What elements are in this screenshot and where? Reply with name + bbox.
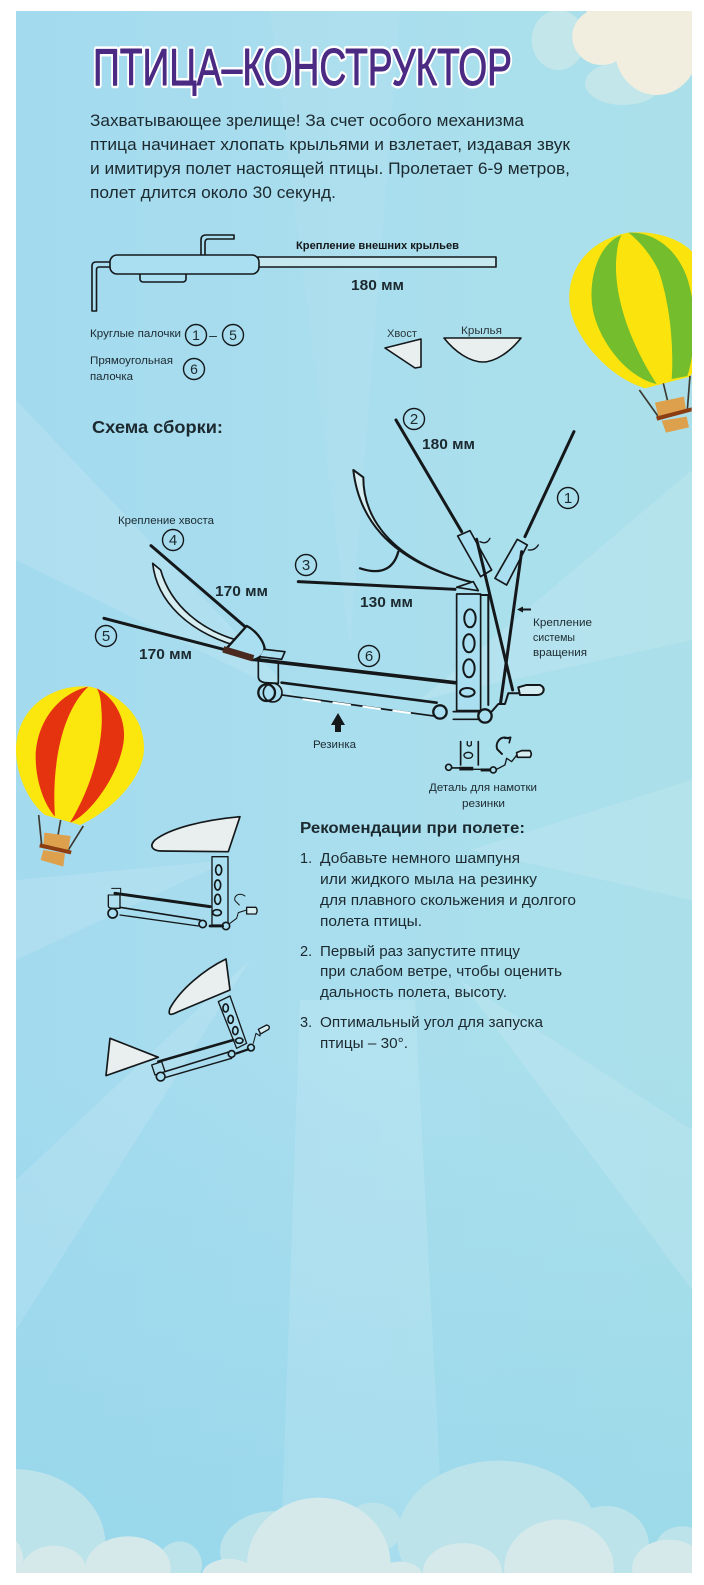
title: ПТИЦА–КОНСТРУКТОР (93, 39, 512, 97)
labels: lengths: 180 мм (422, 436, 475, 453)
legend: tail and wings (385, 325, 521, 368)
legend: sticks: Прямоугольная (90, 355, 173, 367)
labels: lengths (139, 436, 475, 663)
label: 180 mm: 180 мм (351, 277, 404, 294)
legend: sticks: 5 (229, 327, 237, 343)
balloon: red and yellow (16, 686, 144, 867)
lower frame (258, 662, 278, 683)
labels: assembly numbers: 4 (169, 532, 177, 549)
diagram: wing mount rod (92, 235, 496, 311)
intro text: птица начинает хлопать крыльями и взлетает, издавая звук (90, 136, 571, 154)
vertical plate (457, 594, 481, 711)
label: wing mount: Крепление внешних крыльев (296, 240, 459, 252)
list: flight recommendations: 3. (300, 1015, 312, 1031)
clouds: bottom (16, 1460, 692, 1573)
heading: flight recommendations: Рекомендации при полете: (300, 820, 525, 837)
list: flight recommendations: Добавьте немного шампуня (320, 851, 520, 867)
legend: sticks: Круглые палочки (90, 328, 181, 340)
legend: sticks: – (209, 327, 217, 343)
legend: tail and wings: Хвост (387, 328, 417, 340)
labels: lengths: 130 мм (360, 594, 413, 611)
legend: sticks: палочка (90, 371, 134, 383)
list: flight recommendations: 1. (300, 851, 312, 867)
legend: sticks: 6 (190, 361, 198, 377)
rods (104, 420, 574, 683)
labels: parts: Деталь для намотки (429, 782, 537, 794)
intro text: Захватывающее зрелище! За счет особого механизма (90, 112, 525, 130)
diagram: assembly scheme (104, 420, 574, 723)
labels: parts: вращения (533, 647, 587, 659)
arrow: rubber band (331, 713, 345, 732)
intro text: и имитируя полет настоящей птицы. Пролетает 6-9 метров, (90, 160, 570, 178)
legend: sticks (90, 324, 244, 383)
balloon: green and yellow (569, 232, 704, 433)
list: flight recommendations (300, 851, 576, 1052)
list: flight recommendations: полета птицы. (320, 914, 422, 930)
legend: sticks: 1 (192, 327, 200, 343)
intro text: полет длится около 30 секунд. (90, 184, 336, 202)
inner wing (353, 470, 473, 583)
labels: parts: резинки (462, 798, 505, 810)
list: flight recommendations: птицы – 30°. (320, 1036, 408, 1052)
intro text (90, 112, 571, 202)
list: flight recommendations: при слабом ветре, чтобы оценить (320, 964, 562, 980)
list: flight recommendations: Первый раз запустите птицу (320, 944, 521, 960)
labels: parts: системы (533, 632, 575, 644)
labels: assembly numbers: 2 (410, 411, 418, 428)
list: flight recommendations: или жидкого мыла на резинку (320, 872, 538, 888)
tail mount (227, 626, 265, 660)
labels: parts: Крепление (533, 617, 592, 629)
labels: lengths: 170 мм (215, 583, 268, 600)
sleeves (458, 531, 527, 585)
crank handle (518, 685, 544, 695)
labels: assembly numbers: 5 (102, 628, 110, 645)
title: ПТИЦА–КОНСТРУКТОР (93, 39, 512, 97)
tail strip (153, 563, 250, 648)
list: flight recommendations: Оптимальный угол для запуска (320, 1015, 544, 1031)
labels: lengths: 170 мм (139, 646, 192, 663)
diagram: winding part (446, 737, 531, 773)
labels: assembly numbers: 3 (302, 557, 310, 574)
clouds: top right (532, 5, 698, 105)
labels: parts: Крепление хвоста (118, 515, 215, 527)
list: flight recommendations: для плавного скольжения и долгого (320, 893, 576, 909)
diagram: flight position 1 (108, 817, 257, 930)
list: flight recommendations: 2. (300, 944, 312, 960)
labels: assembly numbers (96, 408, 578, 666)
list: flight recommendations: дальность полета, высоту. (320, 985, 507, 1001)
labels: parts (118, 515, 592, 810)
labels: assembly numbers: 1 (564, 490, 572, 507)
heading: assembly scheme: Схема сборки: (92, 417, 223, 437)
diagram: flight position 2 (106, 959, 269, 1081)
arrow: rotation system (517, 606, 531, 612)
labels: parts: Резинка (313, 739, 357, 751)
labels: assembly numbers: 6 (365, 648, 373, 665)
legend: tail and wings: Крылья (461, 325, 502, 337)
